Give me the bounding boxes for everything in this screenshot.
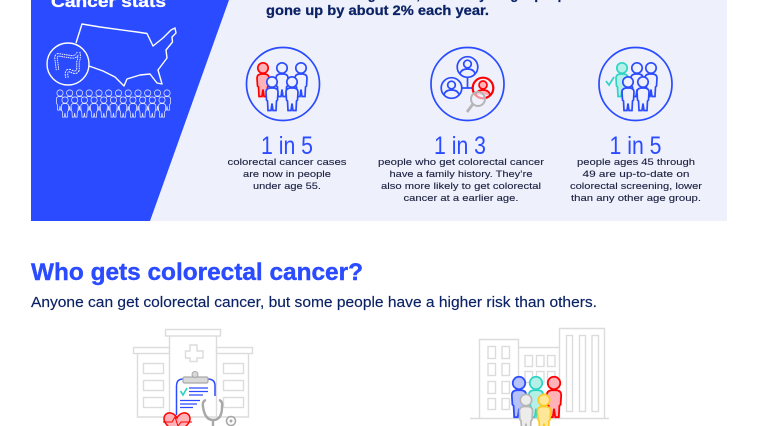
stat: 1 in 3 family history: also more likely to get colorectal — [381, 181, 541, 192]
stat: 1 in 5 young cases: colorectal cancer cases — [228, 157, 347, 168]
stat: 1 in 5 screening: than any other age group. — [571, 193, 701, 204]
stat: 1 in 3 family history: have a family history. They’re — [390, 169, 532, 180]
stat: 1 in 5 young cases: 1 in 5 — [261, 132, 313, 160]
stat: 1 in 5 screening: people ages 45 through — [577, 157, 695, 168]
stat: 1 in 5 young cases: under age 55. — [253, 181, 321, 192]
stat: 1 in 3 family history: 1 in 3 — [434, 132, 486, 160]
icon: hospital with clipboard, heart and stethoscope — [134, 330, 252, 426]
stat: 1 in 5 screening: colorectal screening, lower — [570, 181, 703, 192]
heading: who gets colorectal cancer: Who gets colorectal cancer? — [31, 259, 363, 286]
stat: 1 in 5 screening — [570, 132, 703, 204]
stat: 1 in 5 screening: 1 in 5 — [610, 132, 662, 160]
icon: US map — [76, 24, 176, 86]
icon: family history network — [431, 48, 504, 120]
stat: 1 in 3 family history — [378, 132, 545, 204]
icon: colon in circle — [47, 43, 89, 85]
icon: crowd of people — [56, 90, 171, 117]
stat: 1 in 5 screening: 49 are up-to-date on — [582, 169, 690, 180]
stat: 1 in 3 family history: people who get colorectal cancer — [378, 157, 545, 168]
text: intro statement: gone up by about 2% each year. — [266, 2, 489, 18]
stat: 1 in 3 family history: cancer at a earlier age. — [404, 193, 518, 204]
icon: one of five people highlighted — [246, 48, 320, 120]
stat: 1 in 5 young cases — [228, 132, 347, 192]
panel: blue banner — [31, 0, 229, 221]
panel: cancer stats — [31, 0, 727, 221]
text: risk statement: Anyone can get colorectal cancer, but some people have a higher risk than others. — [31, 295, 597, 311]
text: intro statement — [266, 0, 610, 18]
stat: 1 in 5 young cases: are now in people — [243, 169, 331, 180]
icon: one of five people screened — [599, 48, 672, 120]
icon: city buildings with diverse people — [470, 328, 609, 426]
